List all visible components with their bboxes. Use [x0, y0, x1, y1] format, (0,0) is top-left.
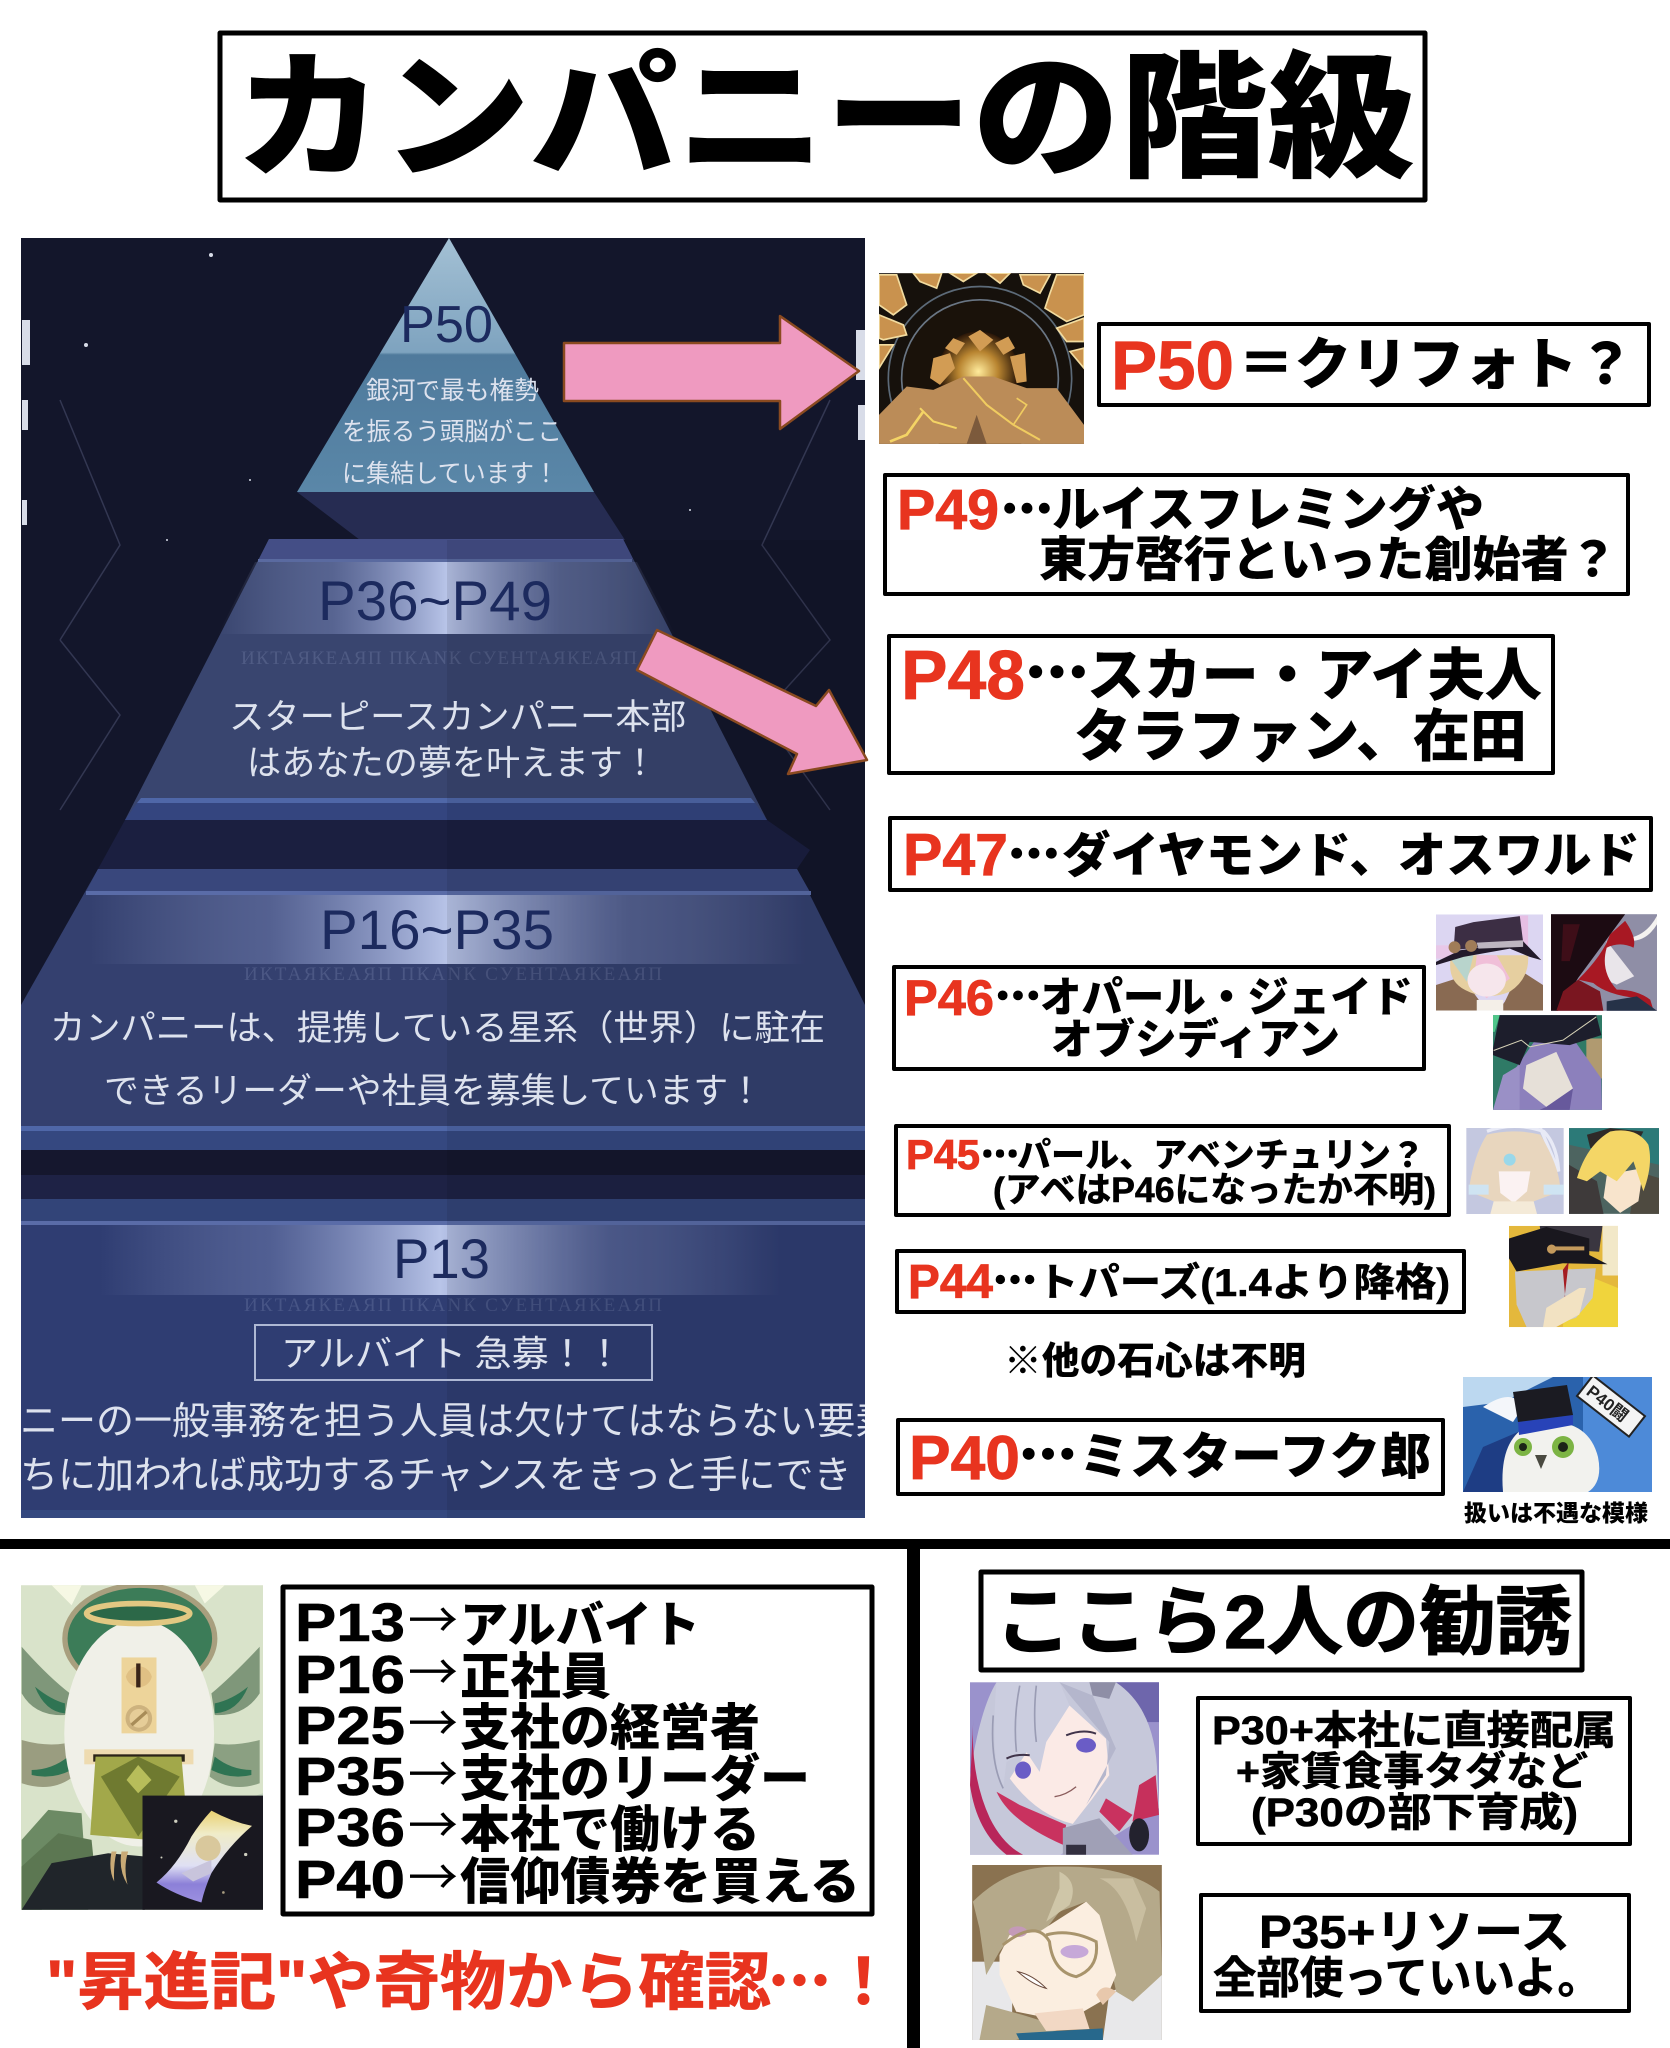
red callout: ！ [832, 1932, 895, 2023]
box: P35 recruit: 全部使っていいよ。 [1213, 1954, 1601, 2003]
label: P49: ルイスフレミングや [1052, 470, 1484, 540]
row: P13 [295, 1581, 700, 1657]
icon: Mr. owl [1463, 1377, 1652, 1492]
icon: Aventurine [1569, 1128, 1659, 1214]
icon: monument with ticket [21, 1585, 263, 1910]
icon: Topaz [1509, 1226, 1618, 1328]
label: P48 [889, 623, 1553, 773]
P36 label: P36~P49 [318, 569, 552, 632]
background diamonds [60, 400, 830, 810]
label: P50: ＝クリフォト？ [1238, 320, 1634, 401]
P13 description [24, 1402, 865, 1492]
row: P35: → [408, 1735, 458, 1807]
box: P30 recruit: P30+本社に直接配属 [1212, 1709, 1616, 1753]
box: P30 recruit: (P30の部下育成) [1251, 1791, 1578, 1835]
label: P48: P48 [901, 636, 1025, 714]
tier: P50: 銀河で最も権勢 [366, 371, 539, 407]
tier: P50 [297, 238, 625, 540]
label: P44: P44 [908, 1256, 993, 1309]
tier gap [21, 1175, 865, 1199]
label: P46 [894, 961, 1424, 1069]
tier: P36~P49: ИКТАЯКЕАЯП ПКАNК СУЕНТАЯКЕАЯП [241, 648, 637, 669]
row: P35 [295, 1735, 810, 1811]
P16 description: できるリーダーや社員を募集しています！ [104, 1063, 763, 1114]
label: P45: (アベはP46になったか不明) [993, 1171, 1436, 1210]
icon: Jade [1551, 914, 1657, 1011]
label: P45 [896, 1124, 1449, 1215]
row: P13: → [408, 1581, 458, 1653]
row: P40: P40 [295, 1850, 405, 1910]
heading: two recruits: ここら2人の勧誘 [995, 1580, 1572, 1664]
tier: P50: を振るう頭脳がここ [342, 412, 562, 448]
icon: Qlipoth [879, 273, 1084, 444]
row: P25: P25 [295, 1696, 405, 1756]
label: P46: オブシディアン [1051, 1006, 1340, 1067]
row: P36 [295, 1786, 760, 1862]
row: P36: 本社で働ける [460, 1790, 760, 1862]
P36 description: スターピースカンパニー本部 [229, 689, 686, 740]
tier: P16~P35 [21, 869, 865, 1150]
row: P25: → [408, 1684, 458, 1756]
label: P46: … [995, 961, 1041, 1027]
arrow: to P50 [564, 316, 859, 429]
label: P49: P49 [897, 478, 999, 542]
P16 label: P16~P35 [320, 898, 554, 961]
vertical divider [907, 1549, 920, 2048]
red callout [46, 1932, 895, 2023]
icon: Opal [1436, 914, 1543, 1010]
tier: P50: P50 [400, 296, 493, 354]
box: P30 recruit: +家賃食事タダなど [1236, 1750, 1588, 1794]
tier: P13: ИКТАЯКЕАЯП ПКАNК СУЕНТАЯКЕАЯП [244, 1295, 662, 1316]
row: P16: 正社員 [460, 1637, 611, 1709]
panel: company pyramid [20, 238, 893, 1518]
label: P48: … [1025, 623, 1089, 715]
label: P48: スカー・アイ夫人 [1087, 630, 1542, 712]
label: P40: P40 [909, 1424, 1020, 1493]
label: P45: … [981, 1124, 1019, 1179]
label: P40 [898, 1409, 1443, 1494]
icon: Pearl [1466, 1128, 1564, 1214]
label: P47: ダイヤモンド、オスワルド [1062, 816, 1640, 886]
P13 recruit box: アルバイト 急募！！ [281, 1325, 623, 1377]
row: P40: → [408, 1838, 458, 1910]
tier: P16~P35: ИКТАЯКЕАЯП ПКАNК СУЕНТАЯКЕАЯП [244, 964, 662, 985]
label: P44 [897, 1245, 1464, 1312]
label: P49 [885, 468, 1628, 594]
P13 description: ちに加われば成功するチャンスをきっと手にでき [20, 1444, 851, 1499]
red callout: "昇進記"や奇物から確認 [46, 1948, 771, 2018]
row: P35: 支社のリーダー [460, 1739, 810, 1811]
label: P50: P50 [1111, 327, 1234, 404]
label: P44: … [993, 1245, 1037, 1309]
row: P25: 支社の経営者 [460, 1688, 760, 1760]
icon: silver-haired portrait [970, 1682, 1159, 1855]
label: P46: P46 [904, 970, 994, 1026]
label: P47: … [1008, 813, 1060, 888]
box: P35 recruit [1201, 1895, 1629, 2011]
tier shadow [98, 820, 810, 869]
horizontal divider [0, 1539, 1670, 1549]
P36 description [232, 699, 685, 778]
label: P48: タラファン、在田 [1074, 691, 1527, 773]
box: rank list [283, 1581, 872, 1914]
P16 description [54, 1010, 823, 1106]
row: P25 [295, 1684, 760, 1760]
label: P40: … [1019, 1409, 1077, 1493]
P13 description: ニーの一般事務を担う人員は欠けてはならない要素 [20, 1390, 893, 1445]
tier: P50: に集結しています！ [342, 454, 558, 490]
row: P16: → [408, 1633, 458, 1705]
P16 description: カンパニーは、提携している星系（世界）に駐在 [50, 1000, 825, 1051]
icon: blond portrait [972, 1865, 1162, 2040]
tier: P13 [21, 1199, 865, 1518]
label: P49: 東方啓行といった創始者？ [1039, 520, 1617, 590]
row: P13: アルバイト [460, 1586, 700, 1657]
icon: Mr. owl: P40闘 [1583, 1382, 1632, 1426]
row: P36: → [408, 1786, 458, 1858]
note: ※他の石心は不明 [1004, 1330, 1306, 1385]
owl caption: 扱いは不遇な模様 [1464, 1494, 1648, 1528]
label: P47: P47 [903, 822, 1008, 888]
title: カンパニーの階級 [235, 6, 1415, 206]
label: P44: トパーズ(1.4より降格) [1037, 1262, 1450, 1305]
P13 label: P13 [393, 1227, 490, 1290]
arrow: to P48 [637, 630, 867, 774]
row: P36: P36 [295, 1798, 405, 1858]
label: P45: パール、アベンチュリン？ [1017, 1128, 1425, 1177]
row: P40 [295, 1838, 860, 1914]
right half shade [447, 540, 865, 1518]
red callout: … [768, 1932, 831, 2023]
row: P13: P13 [295, 1593, 405, 1653]
tier: P36~P49 [125, 539, 767, 820]
label: P50 [1099, 320, 1649, 405]
label: P40: ミスターフク郎 [1079, 1417, 1431, 1489]
row: P16 [295, 1633, 611, 1709]
label: P45: P45 [906, 1131, 980, 1178]
P36 description: はあなたの夢を叶えます！ [247, 735, 657, 786]
row: P35: P35 [295, 1747, 405, 1807]
row: P16: P16 [295, 1645, 405, 1705]
box: P35 recruit: P35+リソース [1259, 1906, 1570, 1958]
box: P30 recruit [1198, 1698, 1630, 1844]
icon: Obsidian [1493, 1015, 1602, 1110]
label: P47 [890, 813, 1651, 890]
label: P49: … [1001, 468, 1053, 543]
label: P46: オパール・ジェイド [1040, 964, 1413, 1025]
row: P40: 信仰債券を買える [460, 1842, 860, 1914]
